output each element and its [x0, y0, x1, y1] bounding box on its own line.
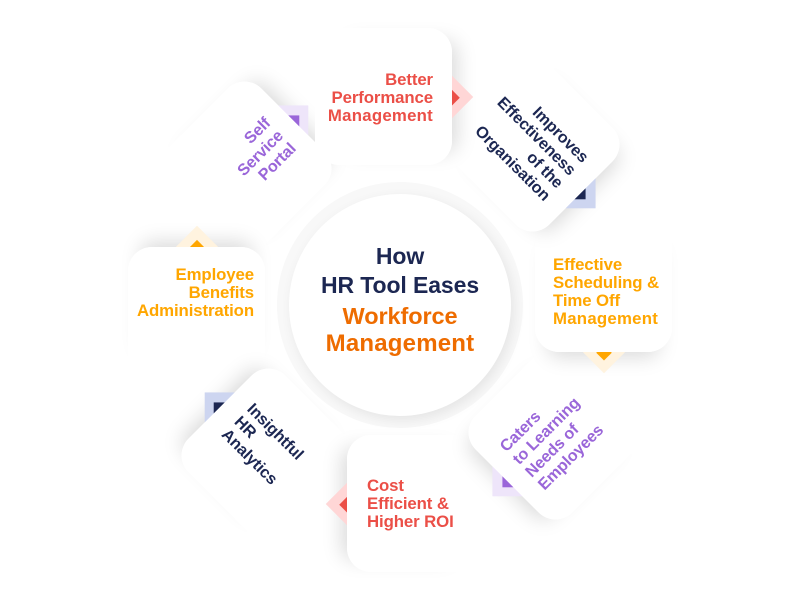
text: Improves Effectiveness of the Organisation — [471, 93, 591, 204]
text: Insightful HR Analytics: HR — [230, 413, 259, 442]
text: Effective Scheduling & Time Off Management: Effective — [553, 254, 622, 274]
text: Self Service Portal: Service — [233, 126, 286, 179]
text: Cost Efficient & Higher ROI: Efficient & — [367, 494, 449, 512]
text: Employee Benefits Administration — [137, 265, 254, 320]
arrow: amber down — [582, 331, 625, 373]
arrow: lavender left — [492, 465, 522, 495]
arrow: red left — [326, 482, 368, 525]
card: Caters to Learning — [465, 393, 607, 523]
title: Workforce — [343, 303, 457, 329]
title — [321, 243, 479, 357]
text: Insightful HR Analytics: Insightful — [243, 400, 306, 464]
text: Cost Efficient & Higher ROI — [367, 476, 454, 530]
text: Improves Effectiveness of the Organisation: of the — [522, 148, 566, 191]
text: Cost Efficient & Higher ROI: Cost — [367, 476, 404, 494]
card face — [171, 359, 365, 552]
text: Employee Benefits Administration: Employee — [176, 265, 254, 284]
text: Improves Effectiveness of the Organisation: Effectiveness — [493, 93, 579, 179]
text: Better Performance Management: Performance — [332, 88, 433, 106]
text: Improves Effectiveness of the Organisation: Improves — [528, 103, 591, 166]
card: Better Performance Management — [315, 36, 473, 164]
arrow: red — [431, 75, 473, 118]
text: Self Service Portal — [233, 113, 299, 183]
card face — [128, 247, 265, 384]
arrow: amber up — [175, 226, 218, 268]
title: How — [376, 243, 424, 269]
text: Effective Scheduling & Time Off Management — [553, 254, 659, 328]
text: Effective Scheduling & Time Off Management: Time Off — [553, 290, 620, 310]
card: Effective Scheduling — [542, 254, 664, 373]
text: Caters to Learning Needs of Employees: Caters — [496, 407, 544, 455]
card: Cost Efficient — [326, 442, 454, 564]
text: Effective Scheduling & Time Off Management: Scheduling & — [553, 272, 659, 292]
central circle — [277, 182, 523, 428]
arrow: blue — [565, 177, 595, 207]
card face — [535, 215, 672, 352]
card: Insightful HR Analytics — [178, 365, 306, 488]
text: Self Service Portal: Portal — [254, 139, 299, 183]
text: Caters to Learning Needs of Employees: Employees — [535, 421, 607, 493]
text: Employee Benefits Administration: Benefits — [189, 283, 254, 302]
title: Management — [326, 330, 474, 357]
circle inner disc — [289, 194, 511, 416]
arrow: lavender — [277, 105, 307, 135]
card: Self Service Portal — [233, 78, 333, 183]
text: Caters to Learning Needs of Employees: Needs of — [522, 420, 582, 480]
text: Cost Efficient & Higher ROI: Higher ROI — [367, 512, 454, 530]
text: Improves Effectiveness of the Organisation: Organisation — [471, 122, 553, 204]
text: Caters to Learning Needs of Employees: to Learning — [509, 393, 583, 468]
card face — [459, 335, 652, 529]
text: Self Service Portal: Self — [240, 113, 273, 147]
card face — [435, 47, 629, 241]
text: Effective Scheduling & Time Off Management: Management — [553, 308, 658, 328]
text: Insightful HR Analytics — [217, 400, 306, 488]
card: Employee Benefits — [136, 226, 258, 320]
arrow: blue left — [205, 392, 235, 422]
card face — [147, 71, 341, 265]
text: Caters to Learning Needs of Employees — [496, 393, 607, 493]
text: Better Performance Management — [328, 70, 433, 124]
text: Insightful HR Analytics: Analytics — [217, 425, 280, 488]
text: Employee Benefits Administration: Administration — [137, 301, 254, 320]
card face — [315, 28, 452, 165]
title: HR Tool Eases — [321, 272, 479, 298]
text: Better Performance Management: Better — [385, 70, 433, 88]
card face — [347, 435, 484, 572]
card: Improves Effectiveness — [471, 93, 623, 235]
text: Better Performance Management: Management — [328, 106, 433, 124]
